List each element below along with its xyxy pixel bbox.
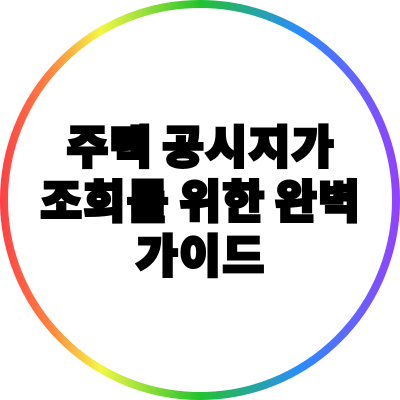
title xyxy=(40,122,362,282)
title: 가이드 xyxy=(136,231,266,282)
title: 조회를 위한 완벽 xyxy=(40,176,362,228)
title: 주택 공시지가 xyxy=(67,122,335,173)
